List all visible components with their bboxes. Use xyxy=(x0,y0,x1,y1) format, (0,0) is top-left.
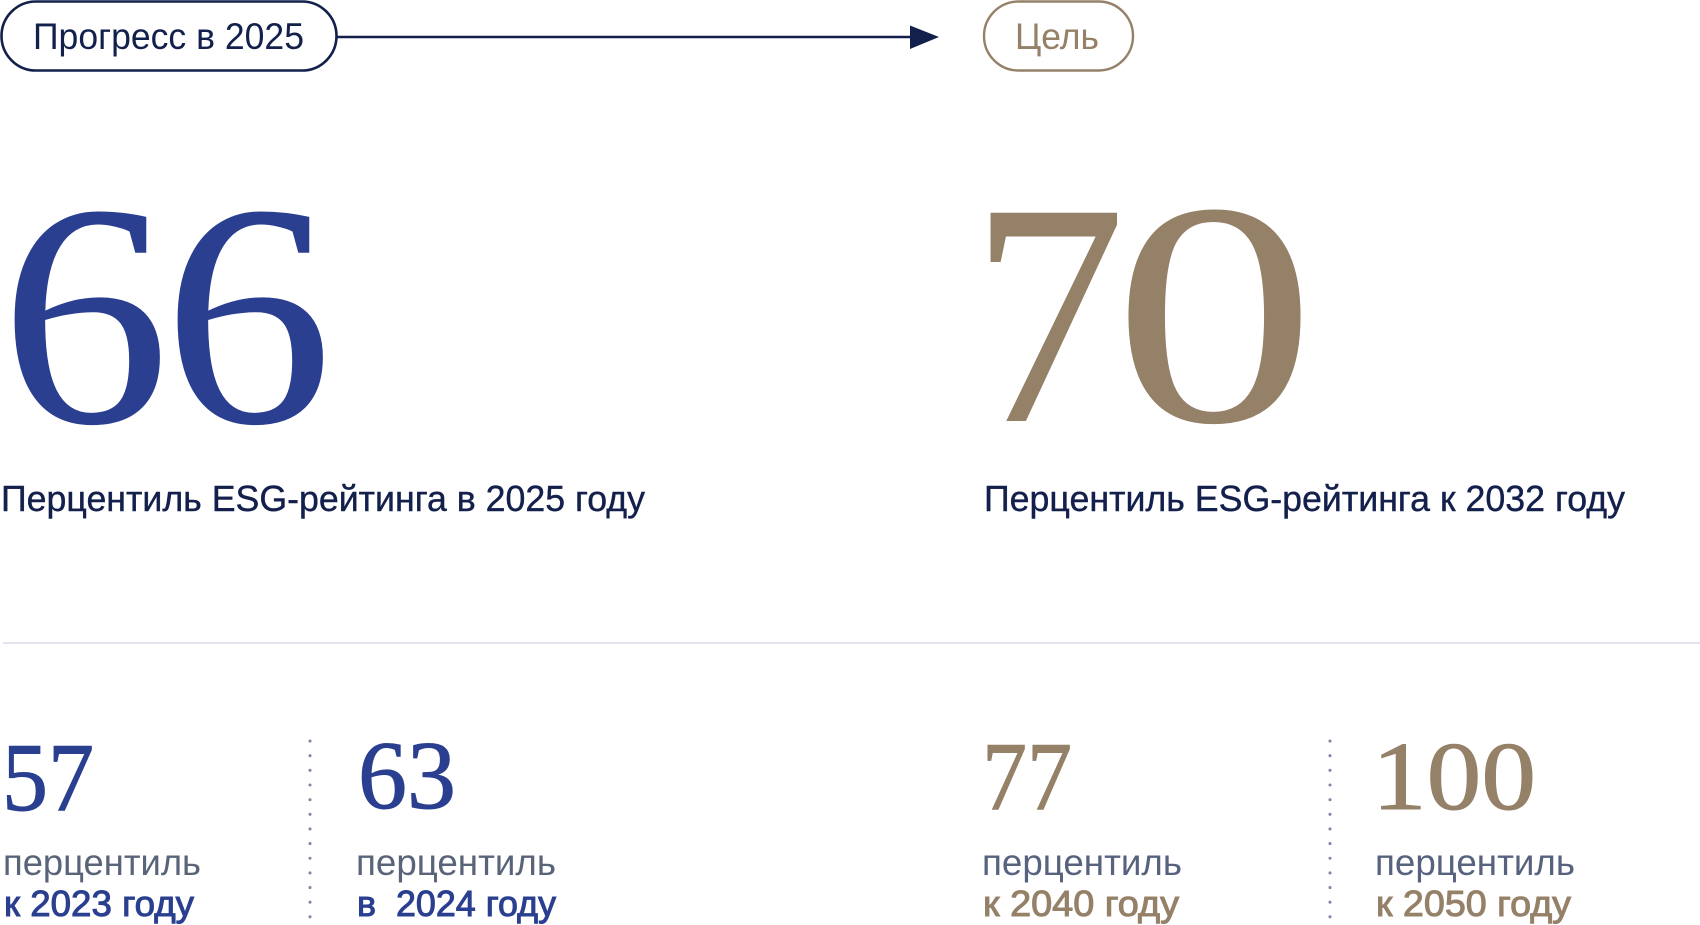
pill: goal xyxy=(984,2,1133,70)
pill: progress 2025 xyxy=(2,2,336,70)
big number 66: 6 xyxy=(0,139,170,491)
stat: 77 percentile by 2040: перцентиль xyxy=(982,842,1182,883)
stat: 77 percentile by 2040: 77 xyxy=(982,723,1072,830)
stat: 100 percentile by 2050 xyxy=(1372,723,1575,924)
stat: 63 percentile in 2024: перцентиль xyxy=(356,842,556,883)
progress pill and arrow xyxy=(2,2,939,70)
big number 66: 6 xyxy=(163,139,333,491)
stat: 57 percentile in 2023: к 2023 году xyxy=(4,883,194,924)
big number 70: 7 xyxy=(970,138,1126,490)
pill: goal: Цель xyxy=(1015,16,1099,57)
stat: 57 percentile in 2023 xyxy=(2,724,201,924)
pill: progress 2025: Прогресс в 2025 xyxy=(33,16,304,57)
arrow to goal xyxy=(337,26,939,49)
big number 70: 0 xyxy=(1113,138,1316,490)
stat: 100 percentile by 2050: перцентиль xyxy=(1375,842,1575,883)
stat: 63 percentile in 2024: в 2024 году xyxy=(357,883,556,924)
stat: 100 percentile by 2050: 100 xyxy=(1372,723,1536,830)
stat: 63 percentile in 2024: 63 xyxy=(358,722,456,829)
dotted divider left xyxy=(308,741,312,918)
stat: 63 percentile in 2024 xyxy=(356,722,556,924)
stat: 100 percentile by 2050: к 2050 году xyxy=(1376,883,1571,924)
caption: 2025 percentile: Перцентиль ESG-рейтинга в 2025 году xyxy=(1,478,645,519)
stat: 77 percentile by 2040 xyxy=(982,723,1182,924)
stat: 77 percentile by 2040: к 2040 году xyxy=(983,883,1179,924)
stat: 57 percentile in 2023: перцентиль xyxy=(3,842,201,883)
caption: 2032 percentile: Перцентиль ESG-рейтинга к 2032 году xyxy=(984,478,1625,519)
stat: 57 percentile in 2023: 57 xyxy=(2,724,94,831)
dotted divider right xyxy=(1328,741,1332,918)
